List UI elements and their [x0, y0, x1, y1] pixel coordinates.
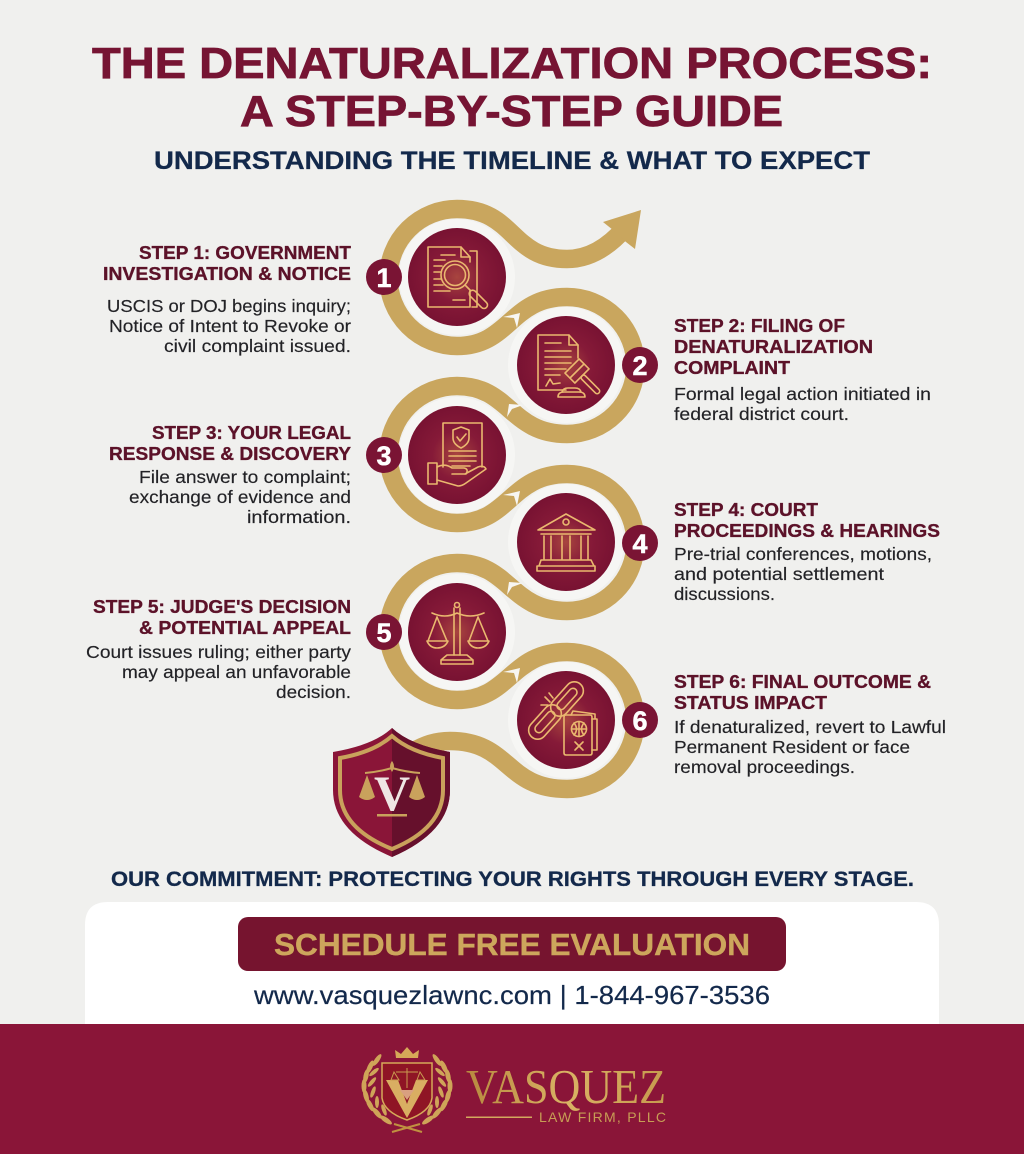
step 6 text: removal proceedings.: [674, 757, 855, 777]
step 1 text: civil complaint issued.: [164, 336, 351, 356]
step 5 icon: scales of justice: [408, 583, 506, 681]
step 3 text: [109, 422, 352, 527]
number badges: 1: [376, 263, 392, 293]
step 4 text: PROCEEDINGS & HEARINGS: [674, 520, 940, 541]
step 4 icon: courthouse: [517, 493, 615, 591]
step 5 text: decision.: [276, 682, 351, 702]
shield emblem: [333, 728, 450, 857]
step 1 text: USCIS or DOJ begins inquiry;: [107, 296, 351, 316]
call-to-action panel: [85, 902, 939, 1024]
number badges: 2: [632, 351, 648, 381]
step 2 text: COMPLAINT: [674, 357, 791, 378]
logo wordmark: VASQUEZ: [466, 1059, 666, 1114]
step 2 text: [674, 315, 931, 424]
arrowhead: [603, 210, 641, 249]
step 6 text: STATUS IMPACT: [674, 692, 828, 713]
step 6 text: Permanent Resident or face: [674, 737, 910, 757]
title: [92, 39, 932, 136]
step 2 text: Formal legal action initiated in: [674, 384, 931, 404]
winding ribbon timeline: [388, 209, 641, 789]
footer band: [0, 1024, 1024, 1154]
step 5 text: may appeal an unfavorable: [122, 662, 351, 682]
junction chevrons: [503, 313, 523, 683]
step 4 text: Pre-trial conferences, motions,: [674, 544, 932, 564]
step 3 icon: document, shield and hand: [408, 406, 506, 504]
number badges: 6: [632, 706, 648, 736]
button: schedule free evaluation: [238, 917, 786, 971]
footer logo: LAW FIRM, PLLC: [539, 1109, 666, 1125]
step 3 text: File answer to complaint;: [139, 467, 351, 487]
button: schedule free evaluation: SCHEDULE FREE EVALUATION: [274, 928, 750, 962]
step 6 text: [674, 671, 946, 777]
step 6 text: If denaturalized, revert to Lawful: [674, 717, 946, 737]
contact line: www.vasquezlawnc.com | 1-844-967-3536: [253, 980, 770, 1010]
title: A STEP-BY-STEP GUIDE: [240, 87, 783, 136]
number badges: [366, 259, 658, 738]
step 3 text: STEP 3: YOUR LEGAL: [152, 422, 351, 443]
step 4 text: STEP 4: COURT: [674, 499, 819, 520]
step 1 text: STEP 1: GOVERNMENT: [139, 242, 352, 263]
subtitle: UNDERSTANDING THE TIMELINE & WHAT TO EXPECT: [154, 147, 870, 175]
step 2 text: federal district court.: [674, 404, 849, 424]
step 2 text: STEP 2: FILING OF: [674, 315, 845, 336]
circle rings: [399, 219, 624, 778]
logo shield: [382, 1063, 432, 1120]
crown: [395, 1047, 419, 1058]
step 2 icon: document and gavel: [517, 316, 615, 414]
step 6 text: STEP 6: FINAL OUTCOME &: [674, 671, 931, 692]
step 5 text: & POTENTIAL APPEAL: [139, 617, 351, 638]
commitment statement: OUR COMMITMENT: PROTECTING YOUR RIGHTS THROUGH EVERY STAGE.: [111, 867, 914, 891]
step 4 text: [674, 499, 940, 604]
step 3 text: RESPONSE & DISCOVERY: [109, 443, 352, 464]
step 5 text: Court issues ruling; either party: [86, 642, 351, 662]
step 3 text: information.: [247, 507, 351, 527]
wreath: [362, 1053, 452, 1126]
step 1 icon: document and magnifier: [408, 228, 506, 326]
step 4 text: and potential settlement: [674, 564, 884, 584]
step 5 text: STEP 5: JUDGE'S DECISION: [93, 596, 351, 617]
title: THE DENATURALIZATION PROCESS:: [92, 39, 932, 88]
number badges: 5: [376, 618, 392, 648]
step 2 text: DENATURALIZATION: [674, 336, 873, 357]
shield emblem: V: [374, 765, 410, 821]
step 1 text: [103, 242, 352, 356]
step 3 text: exchange of evidence and: [129, 487, 351, 507]
footer logo: [362, 1047, 666, 1132]
step 4 text: discussions.: [674, 584, 775, 604]
number badges: 4: [632, 529, 648, 559]
step 6 icon: broken chain and passport: [517, 671, 615, 769]
step 1 text: Notice of Intent to Revoke or: [109, 316, 351, 336]
step 5 text: [86, 596, 351, 702]
number badges: 3: [376, 441, 392, 471]
step 1 text: INVESTIGATION & NOTICE: [103, 263, 351, 284]
